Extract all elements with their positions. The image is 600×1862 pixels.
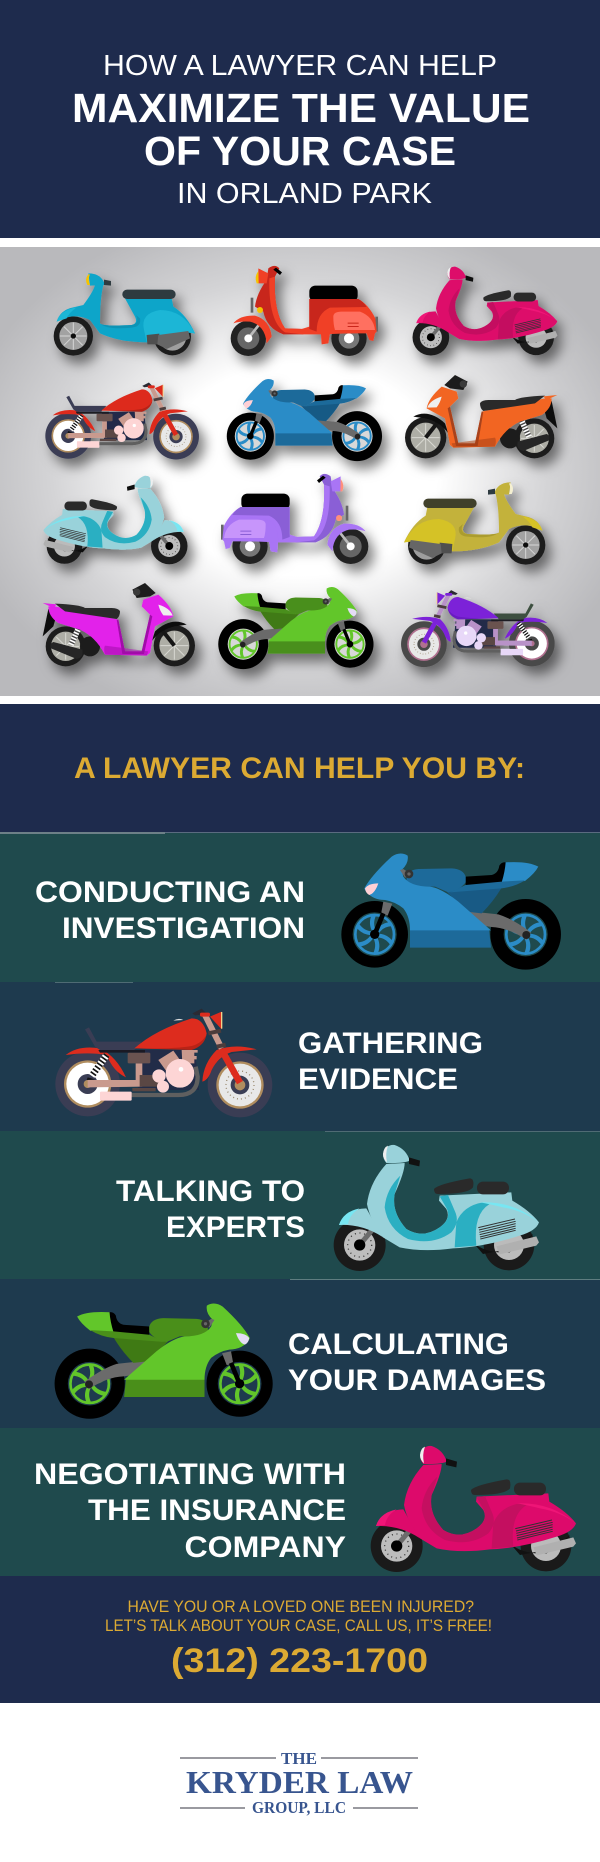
heading: A LAWYER CAN HELP YOU BY: [74,752,525,785]
step text: INVESTIGATION [62,912,305,945]
step text: GATHERING [298,1027,483,1060]
step text: COMPANY [184,1531,346,1564]
step text [34,1458,346,1564]
icon: purple scooter [221,474,368,564]
title line: Maximize the value: MAXIMIZE THE VALUE [72,85,530,131]
icon: blue sport motorcycle [227,379,382,461]
icon: orange step-through scooter [405,375,557,458]
icon: blue sport motorcycle [341,854,561,970]
icon: pink scooter [371,1446,576,1572]
step text [288,1328,546,1397]
logo: The Kryder Law Group, LLC: GROUP, LLC [252,1798,346,1817]
panel: gathering evidence [0,982,600,1131]
phone number: (312) 223-1700 [171,1642,428,1680]
panel: talking to experts [0,1131,600,1279]
icon: red cruiser motorcycle [55,1009,272,1117]
step text: NEGOTIATING WITH [34,1458,346,1491]
step text: YOUR DAMAGES [288,1364,546,1397]
panel: conducting an investigation [0,832,600,982]
callout text line 1: HAVE YOU OR A LOVED ONE BEEN INJURED? [128,1597,474,1616]
icon: yellow scooter [404,482,545,565]
panel: call to action [0,1576,600,1703]
icon: green sport motorcycle [55,1303,273,1419]
panel: negotiating with the insurance company [0,1428,600,1576]
step text: EXPERTS [166,1211,305,1244]
icon: magenta step-through scooter [43,583,195,666]
step text: EVIDENCE [298,1063,458,1096]
title line: In Orland Park: IN ORLAND PARK [177,178,433,210]
icon: green sport motorcycle [218,587,374,669]
panel: calculating your damages [0,1279,600,1428]
step text: CALCULATING [288,1328,509,1361]
panel: lawyer help heading [0,704,600,832]
step text: CONDUCTING AN [35,876,305,909]
icon: purple cruiser motorcycle [401,590,555,667]
icon: aqua scooter [43,476,188,564]
step text [116,1175,305,1244]
step text [298,1027,483,1096]
title line: How a lawyer can help: HOW A LAWYER CAN HELP [103,50,497,82]
step text [35,876,305,945]
step text: THE INSURANCE [88,1494,346,1527]
icon: pink scooter [413,267,557,356]
logo: The Kryder Law Group, LLC: KRYDER LAW [186,1764,413,1800]
callout text line 2: LET’S TALK ABOUT YOUR CASE, CALL US, IT’S FREE! [105,1616,492,1635]
logo: The Kryder Law Group, LLC: THE [281,1749,317,1768]
title line: Of your case: OF YOUR CASE [144,128,456,174]
header panel [0,0,600,238]
panel: motorcycle gallery [0,247,600,696]
icon: red cruiser motorcycle [45,383,199,459]
icon: aqua scooter [334,1145,539,1271]
logo: The Kryder Law Group, LLC [180,1749,418,1817]
step text: TALKING TO [116,1175,305,1208]
icon: teal scooter [54,273,195,356]
icon: red scooter [231,266,378,356]
